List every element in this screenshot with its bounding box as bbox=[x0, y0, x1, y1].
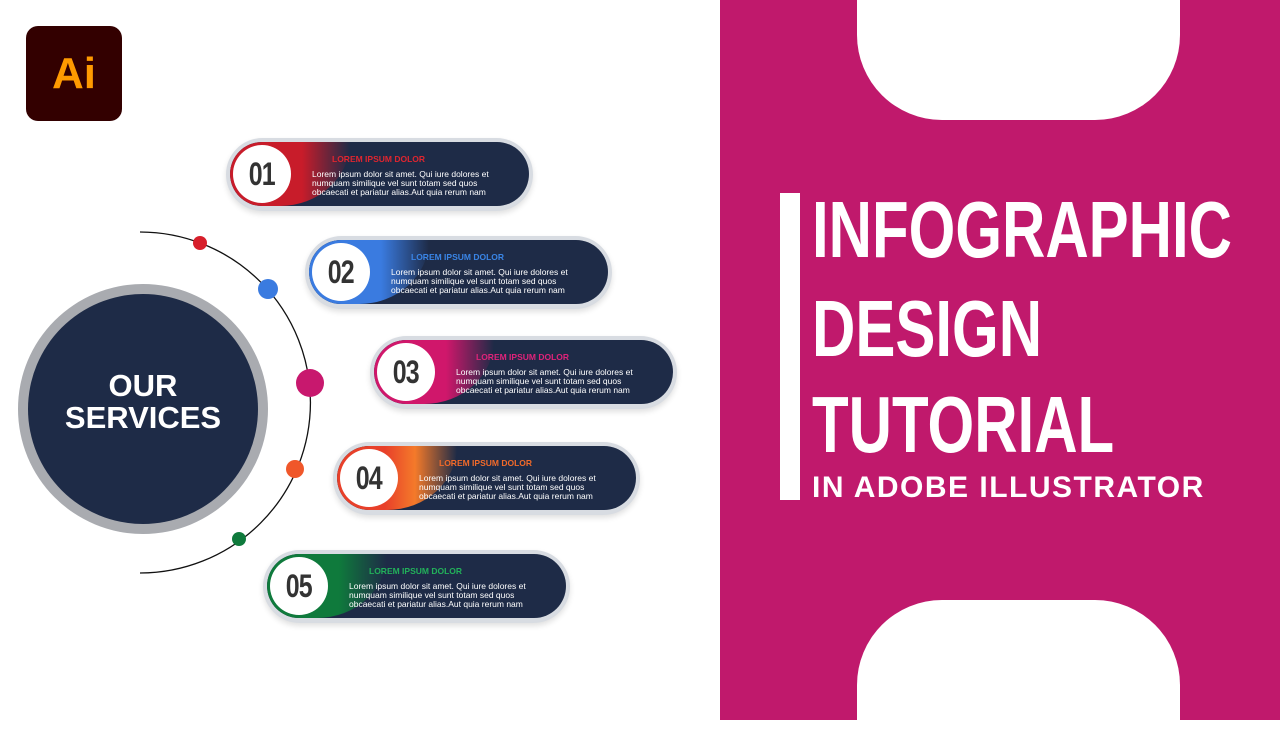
subtitle: IN ADOBE ILLUSTRATOR bbox=[812, 471, 1205, 504]
card 05: LOREM IPSUM DOLOR bbox=[369, 566, 462, 576]
central circle: our services: SERVICES bbox=[65, 400, 221, 435]
arc with dots bbox=[140, 231, 324, 574]
decorative white bottom shape bbox=[857, 600, 1180, 730]
card 03: Lorem ipsum dolor sit amet. Qui iure dolores et bbox=[456, 367, 633, 377]
card 04 bbox=[333, 442, 640, 515]
card 05: obcaecati et pariatur alias.Aut quia rerum nam bbox=[349, 599, 523, 609]
central circle: our services bbox=[18, 284, 268, 534]
card 05: Lorem ipsum dolor sit amet. Qui iure dolores et bbox=[349, 581, 526, 591]
panel: title background bbox=[720, 0, 1280, 720]
icon: adobe illustrator logo: Ai bbox=[52, 49, 96, 98]
card 02: obcaecati et pariatur alias.Aut quia rerum nam bbox=[391, 285, 565, 295]
decorative white top shape bbox=[857, 0, 1180, 120]
card 03 bbox=[370, 336, 677, 409]
card 02: Lorem ipsum dolor sit amet. Qui iure dolores et bbox=[391, 267, 568, 277]
card 05: 05 bbox=[286, 568, 312, 604]
card 01: LOREM IPSUM DOLOR bbox=[332, 154, 425, 164]
card 02: numquam similique vel sunt totam sed quos bbox=[391, 276, 556, 286]
card 01: obcaecati et pariatur alias.Aut quia rerum nam bbox=[312, 187, 486, 197]
central circle: our services: OUR bbox=[109, 368, 177, 403]
card 01 bbox=[226, 138, 533, 211]
card 02: LOREM IPSUM DOLOR bbox=[411, 252, 504, 262]
card 03: LOREM IPSUM DOLOR bbox=[476, 352, 569, 362]
card 01: Lorem ipsum dolor sit amet. Qui iure dolores et bbox=[312, 169, 489, 179]
card 03: 03 bbox=[393, 354, 419, 390]
card 02 bbox=[305, 236, 612, 309]
title: INFOGRAPHIC bbox=[812, 185, 1232, 274]
icon: adobe illustrator logo bbox=[26, 26, 122, 121]
card 05 bbox=[263, 550, 570, 623]
card 03: obcaecati et pariatur alias.Aut quia rerum nam bbox=[456, 385, 630, 395]
card 01: 01 bbox=[249, 156, 275, 192]
card 05: numquam similique vel sunt totam sed quos bbox=[349, 590, 514, 600]
card 03: numquam similique vel sunt totam sed quos bbox=[456, 376, 621, 386]
card 04: 04 bbox=[356, 460, 382, 496]
title bar accent bbox=[780, 193, 800, 500]
card 01: numquam similique vel sunt totam sed quos bbox=[312, 178, 477, 188]
card 04: Lorem ipsum dolor sit amet. Qui iure dolores et bbox=[419, 473, 596, 483]
card 04: obcaecati et pariatur alias.Aut quia rerum nam bbox=[419, 491, 593, 501]
title: TUTORIAL bbox=[812, 380, 1114, 469]
card 02: 02 bbox=[328, 254, 354, 290]
card 04: numquam similique vel sunt totam sed quos bbox=[419, 482, 584, 492]
card 04: LOREM IPSUM DOLOR bbox=[439, 458, 532, 468]
title: DESIGN bbox=[812, 284, 1042, 373]
